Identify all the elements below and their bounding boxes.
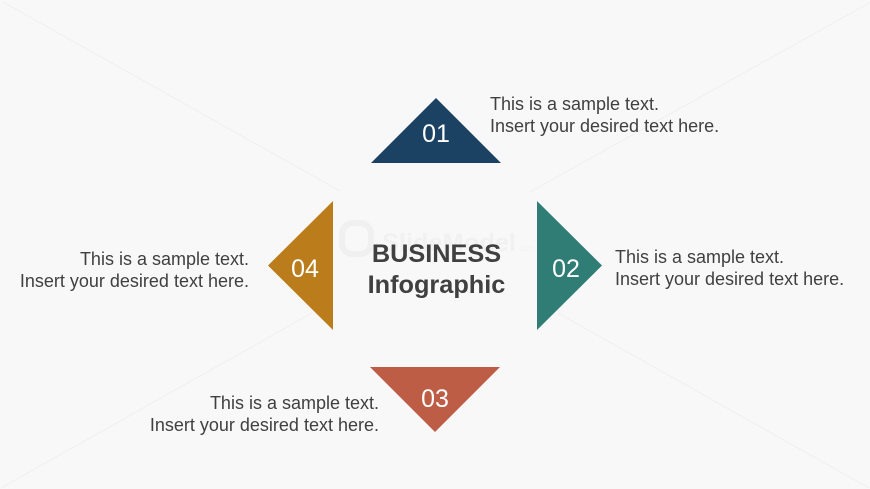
text block 01: This is a sample text.	[490, 94, 659, 114]
center title: BUSINESS	[372, 240, 501, 268]
text block 03	[150, 393, 379, 435]
triangle 02	[537, 201, 602, 330]
text block 04	[20, 249, 249, 291]
text block 02: Insert your desired text here.	[615, 269, 844, 289]
watermark	[342, 223, 535, 257]
text block 02	[615, 247, 844, 289]
text block 01	[490, 94, 719, 136]
text block 04: This is a sample text.	[80, 249, 249, 269]
triangle 01: 01	[422, 120, 450, 148]
center title	[368, 240, 505, 299]
center title: Infographic	[368, 271, 505, 299]
text block 03: Insert your desired text here.	[150, 415, 379, 435]
text block 03: This is a sample text.	[210, 393, 379, 413]
triangle 01	[371, 98, 501, 163]
triangle 03: 03	[421, 385, 449, 413]
text block 01: Insert your desired text here.	[490, 116, 719, 136]
watermark: SlideModel	[382, 229, 516, 257]
triangle 02: 02	[552, 255, 580, 283]
text block 02: This is a sample text.	[615, 247, 784, 267]
triangle 04	[268, 201, 333, 330]
text block 04: Insert your desired text here.	[20, 271, 249, 291]
triangle 04: 04	[291, 255, 319, 283]
triangle 03	[370, 367, 500, 432]
watermark: .com	[517, 244, 535, 253]
